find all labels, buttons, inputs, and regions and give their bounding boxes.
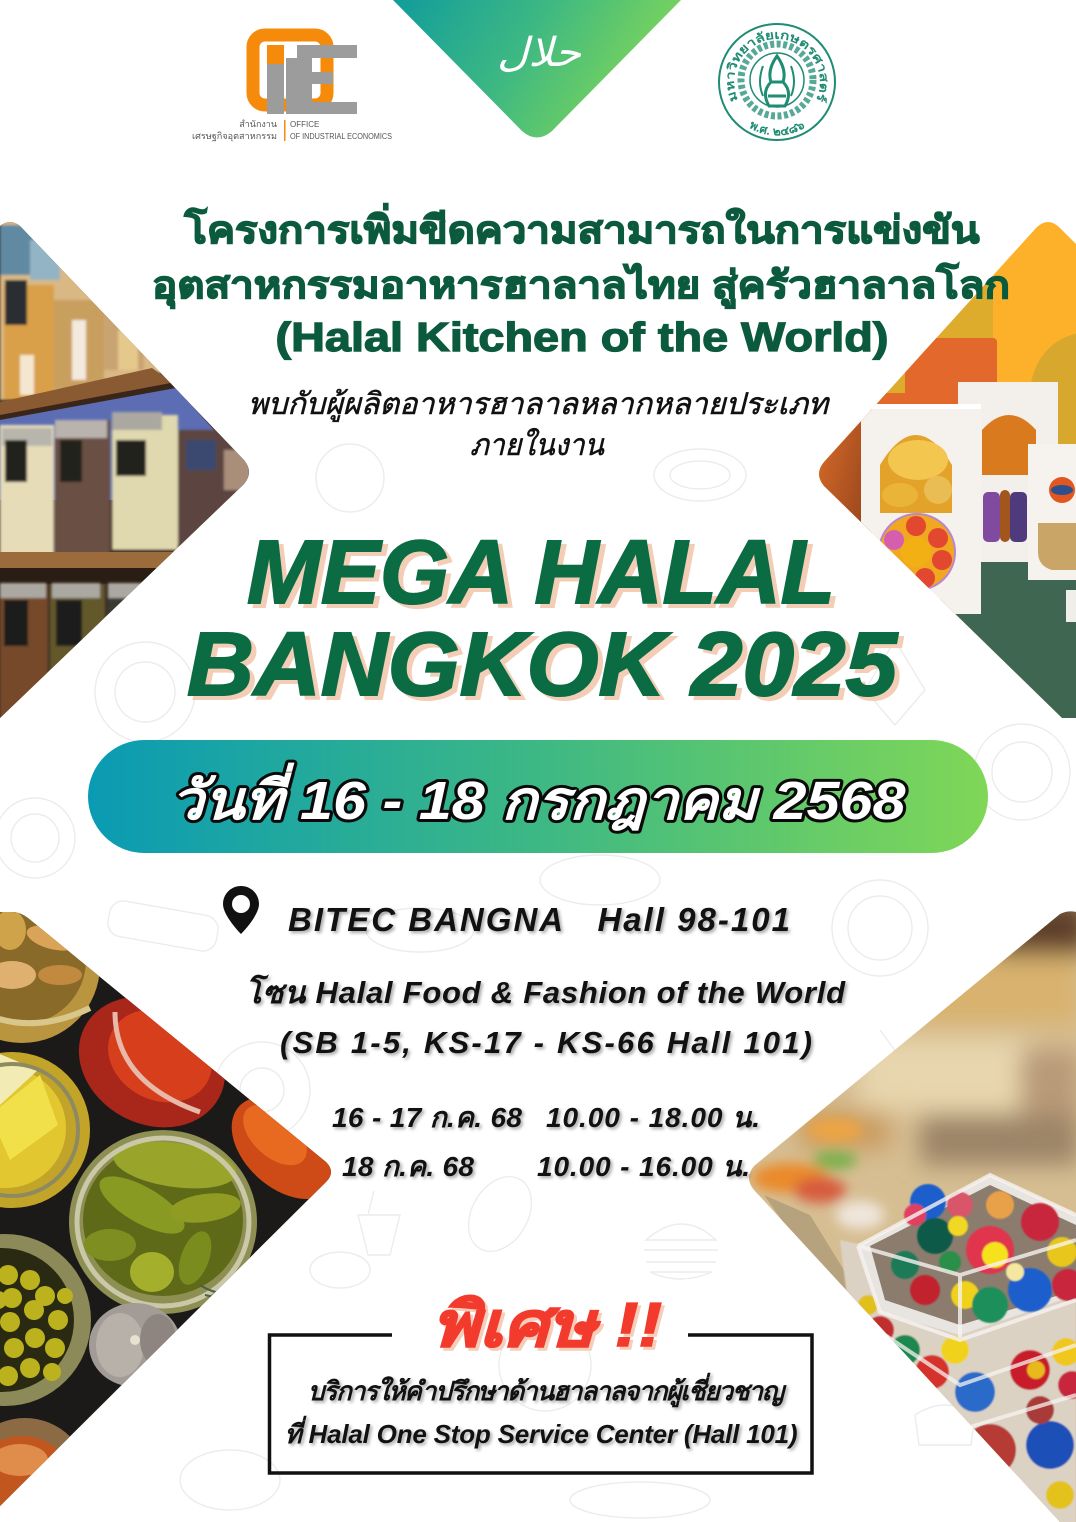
garlic xyxy=(89,1303,181,1387)
pickle jar xyxy=(69,1130,257,1314)
lemon jar xyxy=(0,1052,90,1208)
date banner xyxy=(88,740,988,853)
bottom jars xyxy=(0,581,142,718)
date banner: วันที่ 16 - 18 กรกฎาคม 2568 xyxy=(170,762,906,831)
background food doodles xyxy=(0,444,1070,1518)
lower candy box xyxy=(840,1240,1076,1522)
right tomato jar xyxy=(232,1100,331,1199)
subtitle: ภายในงาน xyxy=(470,428,605,462)
middle jars xyxy=(0,412,250,555)
title: (Halal Kitchen of the World) xyxy=(276,314,888,360)
halal triangle badge xyxy=(393,0,681,138)
event name: MEGA HALAL xyxy=(247,523,835,623)
title: โครงการเพิ่มขีดความสามารถในการแข่งขัน xyxy=(183,203,980,252)
special service box xyxy=(270,1291,812,1473)
logo: Office of Industrial Economics: OFFICE xyxy=(290,120,319,129)
title: อุตสาหกรรมอาหารฮาลาลไทย สู่ครัวฮาลาลโลก xyxy=(152,262,1010,309)
subtitle: พบกับผู้ผลิตอาหารฮาลาลหลากหลายประเภท xyxy=(248,388,830,422)
logo: Kasetsart University seal: มหาวิทยาลัยเกษตรศาสตร์ xyxy=(726,31,828,104)
special service box: บริการให้คำปรึกษาด้านฮาลาลจากผู้เชี่ยวชาญ xyxy=(308,1372,787,1408)
upper wooden shelf xyxy=(0,368,173,415)
photo: jars on wooden shelves xyxy=(0,220,260,724)
peas jar xyxy=(0,1234,91,1406)
zone text xyxy=(245,974,846,1060)
logo: Office of Industrial Economics: สำนักงาน xyxy=(239,119,277,129)
opening hours: 16 - 17 ก.ค. 68 xyxy=(332,1102,522,1133)
opening hours xyxy=(332,1102,760,1182)
blue wall xyxy=(0,388,250,500)
zone text: (SB 1-5, KS-17 - KS-66 Hall 101) xyxy=(280,1025,812,1060)
photo: snack boxes on green table xyxy=(810,215,1076,725)
logo: Office of Industrial Economics: OF INDUSTRIAL ECONOMICS xyxy=(290,132,392,141)
opening hours: 10.00 - 18.00 น. xyxy=(546,1102,760,1133)
subtitle xyxy=(248,388,830,462)
special service box: ที่ Halal One Stop Service Center (Hall 101) xyxy=(285,1415,798,1449)
photo: pickled food jars xyxy=(0,912,331,1506)
event name xyxy=(187,523,899,715)
opening hours: 10.00 - 16.00 น. xyxy=(537,1151,750,1182)
zone text: โซน Halal Food & Fashion of the World xyxy=(245,974,846,1010)
logo: Kasetsart University seal: พ.ศ. ๒๔๘๖ xyxy=(750,122,804,136)
venue: BITEC BANGNA Hall 98-101 xyxy=(288,901,790,938)
special heading: พิเศษ !! xyxy=(432,1291,662,1360)
upper candy box xyxy=(858,1175,1076,1335)
crayfish jar xyxy=(0,1418,70,1506)
opening hours: 18 ก.ค. 68 xyxy=(342,1151,474,1182)
logo: Office of Industrial Economics: เศรษฐกิจอุตสาหกรรม xyxy=(192,131,277,142)
top shelf jars xyxy=(0,220,160,400)
title xyxy=(152,203,1010,360)
photo: candy boxes xyxy=(740,900,1076,1522)
lower wooden shelf xyxy=(0,552,173,568)
mushroom jar xyxy=(0,912,99,1043)
halal triangle badge: حلال xyxy=(497,30,581,76)
logo: Office of Industrial Economics xyxy=(192,35,392,142)
icon: location pin xyxy=(223,886,259,934)
red jar xyxy=(78,998,225,1128)
logo: Kasetsart University seal xyxy=(718,23,836,141)
event name: BANGKOK 2025 xyxy=(187,615,899,715)
